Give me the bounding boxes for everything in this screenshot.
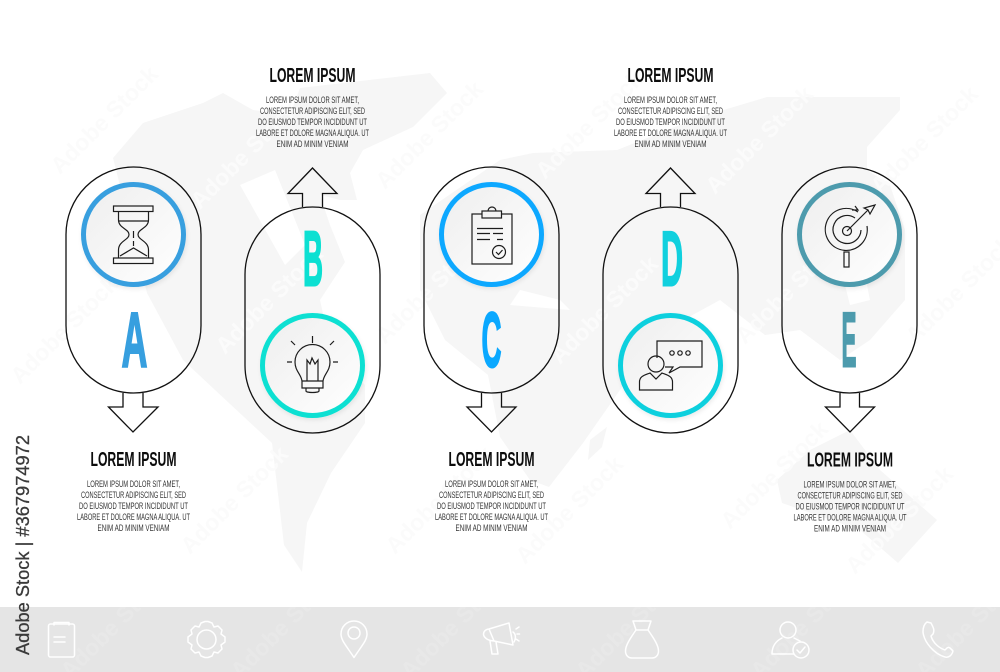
- watermark: Adobe Stock: [185, 96, 303, 214]
- text block B: DO EIUSMOD TEMPOR INCIDIDUNT UT: [258, 116, 367, 127]
- watermark: Adobe Stock: [530, 66, 648, 184]
- text block D: LABORE ET DOLORE MAGNA ALIQUA. UT: [614, 127, 727, 138]
- text block E: [794, 450, 907, 534]
- pill D: [603, 207, 738, 433]
- band icon: money bag: [626, 621, 658, 658]
- panel D: D: [661, 214, 683, 302]
- text block C: DO EIUSMOD TEMPOR INCIDIDUNT UT: [437, 500, 546, 511]
- watermark: Adobe Stock: [545, 251, 663, 369]
- icon ring E: [800, 184, 900, 284]
- text block B: LOREM IPSUM DOLOR SIT AMET,: [266, 94, 359, 105]
- text block E: LABORE ET DOLORE MAGNA ALIQUA. UT: [794, 512, 907, 522]
- arrow B: [288, 168, 337, 207]
- text block D: LOREM IPSUM: [628, 65, 714, 87]
- icon: light bulb: [287, 336, 338, 392]
- watermark: Adobe Stock: [370, 231, 488, 349]
- panel C: [424, 167, 559, 432]
- icon: speaker with chat bubble: [640, 341, 702, 390]
- text block D: CONSECTETUR ADIPISCING ELIT, SED: [618, 105, 723, 116]
- panel A: [66, 167, 201, 432]
- text block C: ENIM AD MINIM VENIAM: [456, 522, 528, 533]
- text block B: [256, 65, 369, 149]
- watermark: Adobe Stock: [45, 61, 163, 179]
- band icon: megaphone: [484, 623, 520, 654]
- text block E: DO EIUSMOD TEMPOR INCIDIDUNT UT: [796, 500, 905, 512]
- text block E: LOREM IPSUM: [807, 450, 893, 472]
- text block A: LABORE ET DOLORE MAGNA ALIQUA. UT: [77, 511, 190, 522]
- icon ring B: [262, 316, 362, 416]
- text block A: LOREM IPSUM: [90, 449, 176, 471]
- icon ring C: [442, 184, 542, 284]
- watermark: Adobe Stock: [715, 416, 833, 534]
- text block C: [435, 449, 548, 533]
- watermark: Adobe Stock: [730, 231, 848, 349]
- icon ring A: [84, 184, 184, 284]
- text block B: CONSECTETUR ADIPISCING ELIT, SED: [260, 105, 365, 116]
- watermark: Adobe Stock: [840, 461, 958, 579]
- text block E: CONSECTETUR ADIPISCING ELIT, SED: [798, 490, 903, 500]
- text block C: LABORE ET DOLORE MAGNA ALIQUA. UT: [435, 511, 548, 522]
- arrow E: [826, 393, 874, 432]
- watermark: Adobe Stock: [700, 81, 818, 199]
- pill A: [66, 167, 201, 393]
- watermark: Adobe Stock: [380, 441, 498, 559]
- watermark: Adobe Stock: [175, 441, 293, 559]
- text block B: ENIM AD MINIM VENIAM: [276, 138, 349, 149]
- watermark: [5, 61, 1000, 579]
- text block D: DO EIUSMOD TEMPOR INCIDIDUNT UT: [616, 116, 725, 127]
- watermark: Adobe Stock: [510, 451, 628, 569]
- pill E: [782, 167, 917, 393]
- icon: hourglass: [114, 206, 153, 264]
- text block C: LOREM IPSUM: [448, 449, 534, 471]
- watermark: Adobe Stock: [370, 76, 488, 194]
- band icon: phone: [923, 622, 953, 657]
- pill B: [245, 207, 380, 433]
- bottom band: [0, 607, 1000, 672]
- arrow D: [646, 168, 695, 207]
- band icon: gear: [188, 622, 225, 658]
- icon: target with arrow: [825, 205, 875, 267]
- text block D: ENIM AD MINIM VENIAM: [634, 138, 707, 149]
- icon ring D: [620, 316, 720, 416]
- panel A: A: [122, 296, 148, 384]
- pill C: [424, 167, 559, 393]
- text block B: LABORE ET DOLORE MAGNA ALIQUA. UT: [256, 127, 369, 138]
- text block E: ENIM AD MINIM VENIAM: [814, 522, 886, 534]
- text block D: [614, 65, 727, 149]
- text block D: LOREM IPSUM DOLOR SIT AMET,: [624, 94, 717, 105]
- panel E: E: [842, 296, 856, 384]
- icon: clipboard: [472, 207, 512, 264]
- text block C: CONSECTETUR ADIPISCING ELIT, SED: [439, 489, 544, 500]
- text block A: LOREM IPSUM DOLOR SIT AMET,: [87, 478, 180, 489]
- text block C: LOREM IPSUM DOLOR SIT AMET,: [445, 478, 538, 489]
- band icon: user check: [772, 622, 809, 658]
- text block A: CONSECTETUR ADIPISCING ELIT, SED: [81, 489, 186, 500]
- vertical stock label: Adobe Stock | #367974972: [12, 435, 33, 655]
- arrow C: [467, 393, 516, 432]
- panel D: [603, 168, 738, 433]
- panel B: [245, 168, 380, 433]
- band watermark: [55, 566, 1000, 672]
- band icon: clipboard: [48, 622, 74, 657]
- band icon: location pin: [341, 621, 367, 658]
- watermark: Adobe Stock: [865, 81, 983, 199]
- background world map: [113, 73, 937, 572]
- panel B: B: [303, 214, 323, 302]
- text block A: [77, 449, 190, 533]
- text block A: DO EIUSMOD TEMPOR INCIDIDUNT UT: [79, 500, 188, 511]
- text block E: LOREM IPSUM DOLOR SIT AMET,: [804, 478, 896, 490]
- text block B: LOREM IPSUM: [270, 65, 356, 87]
- panel E: [782, 167, 917, 432]
- watermark: Adobe Stock: [5, 271, 123, 389]
- arrow A: [108, 393, 158, 432]
- panel C: C: [482, 296, 502, 384]
- watermark: Adobe Stock: [210, 241, 328, 359]
- text block A: ENIM AD MINIM VENIAM: [98, 522, 170, 533]
